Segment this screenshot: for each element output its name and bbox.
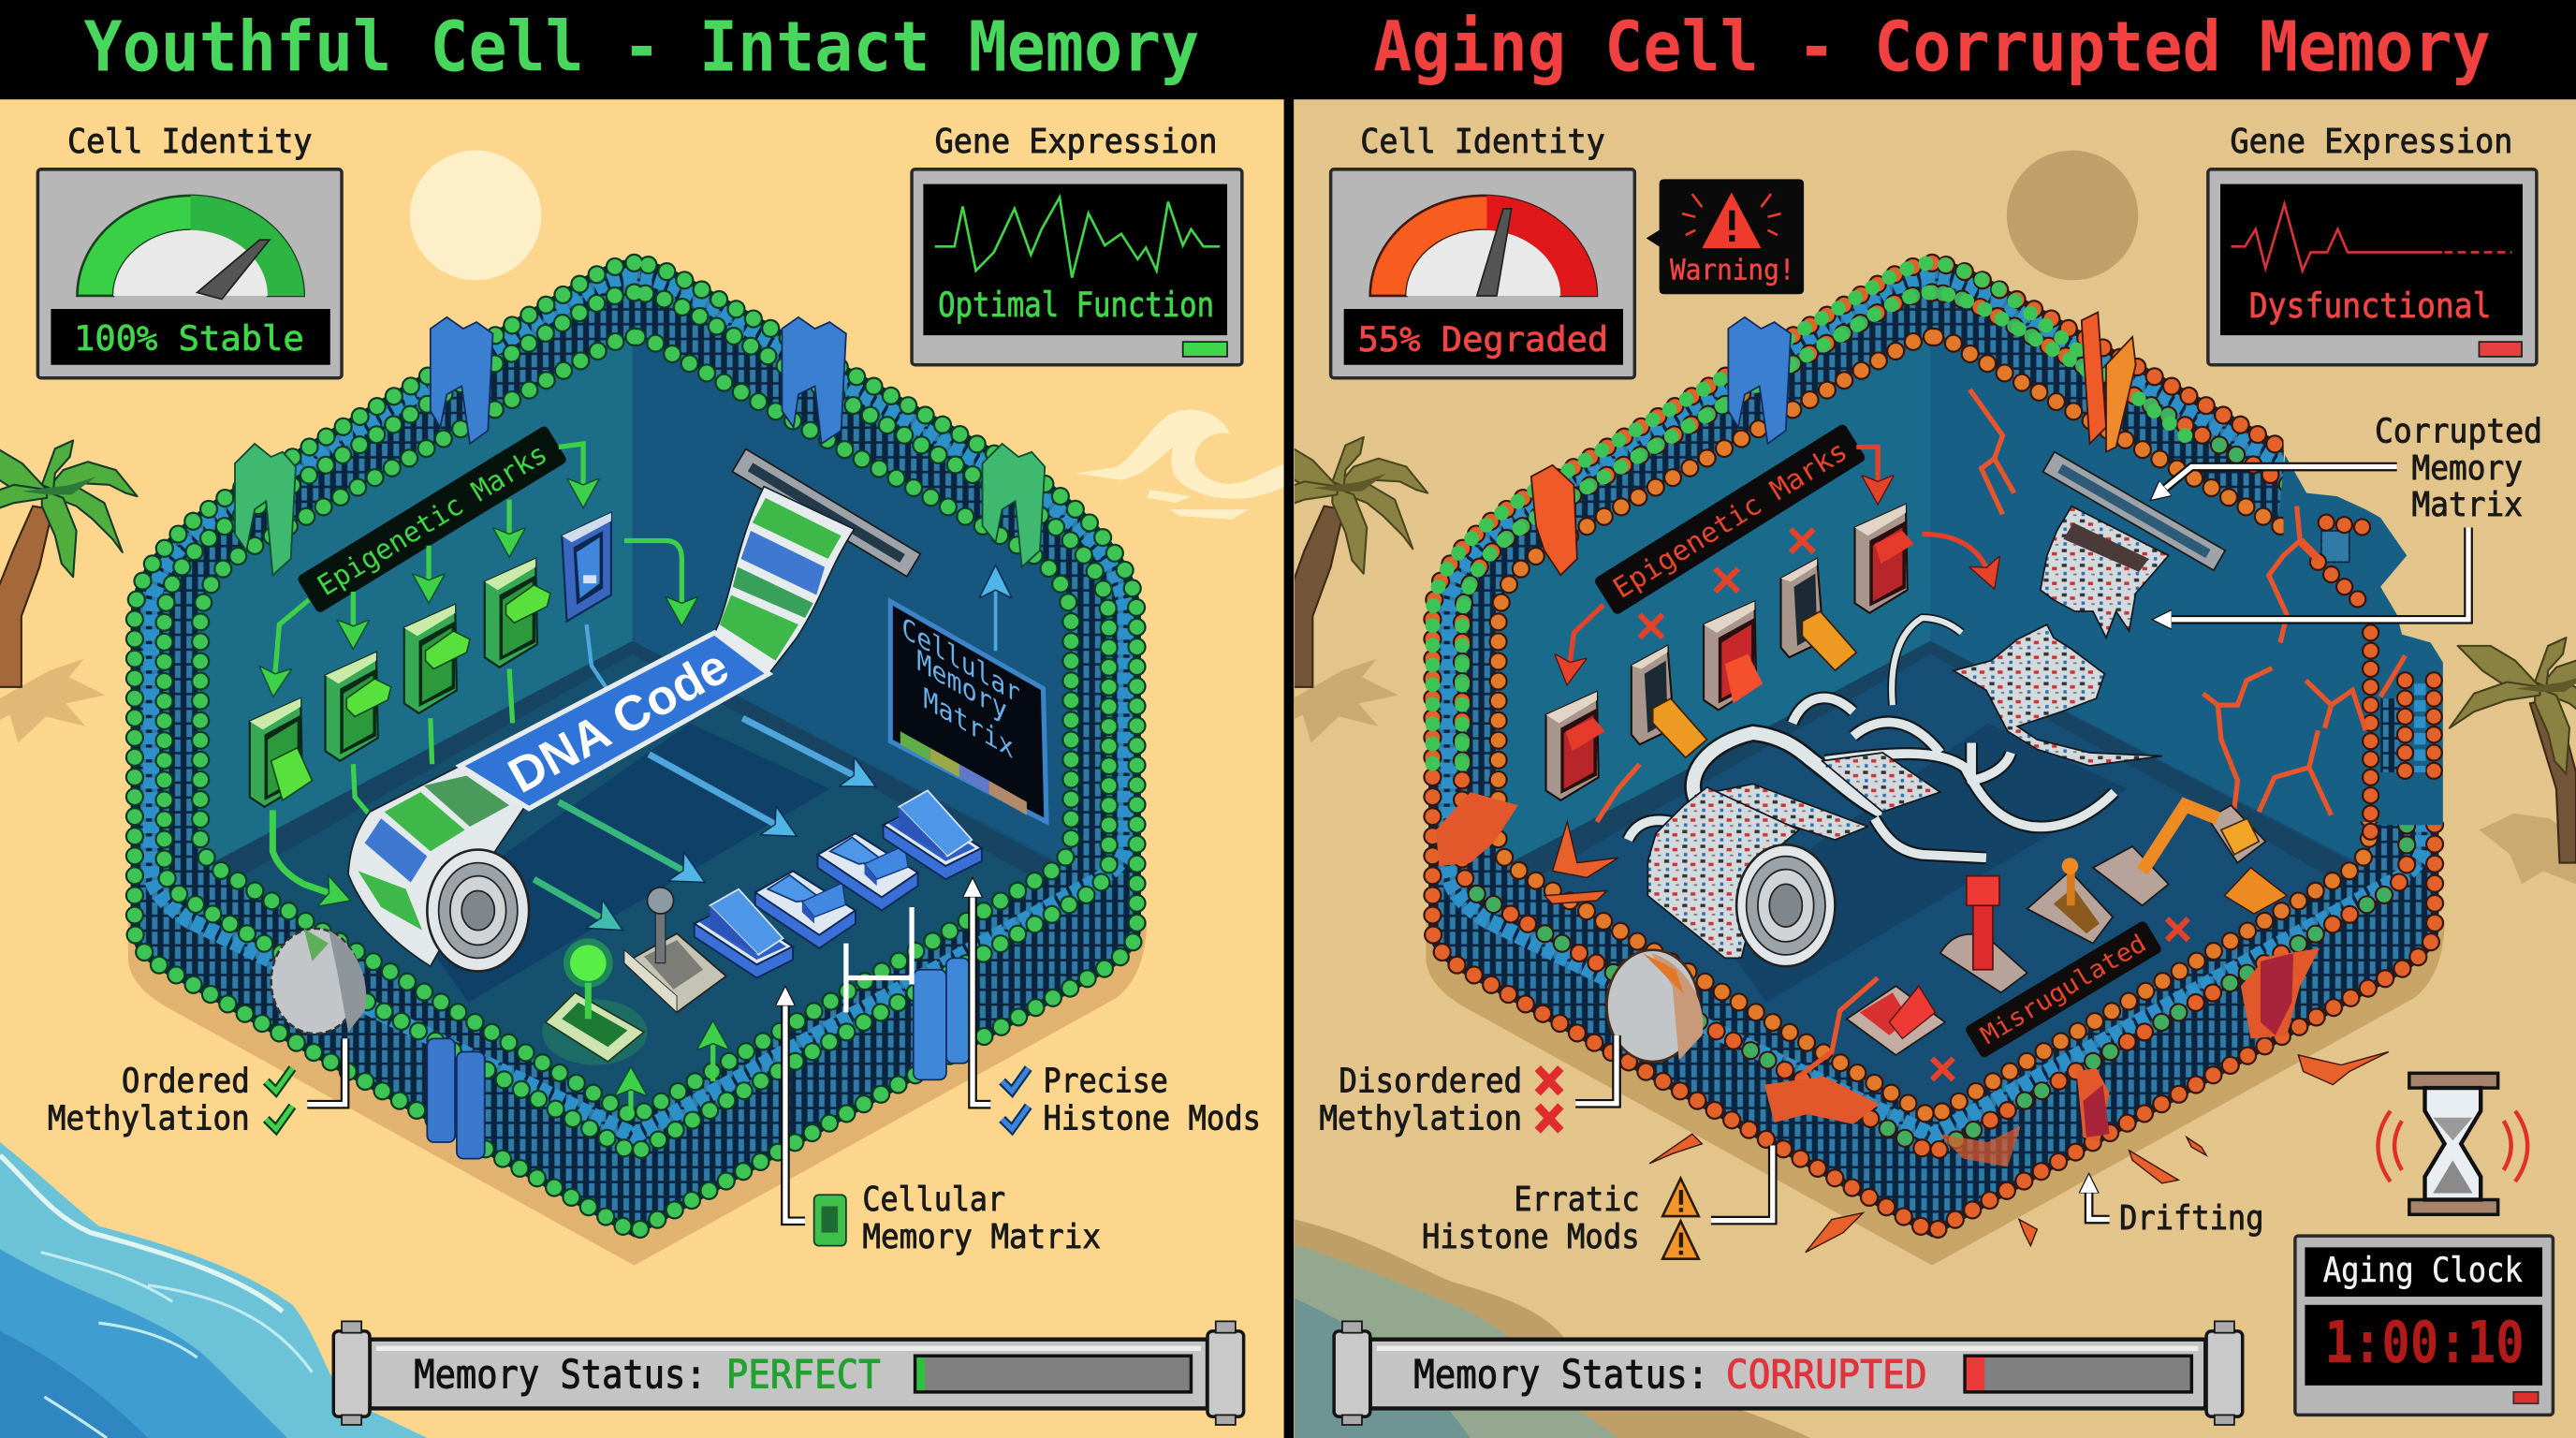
label: cell identity: Cell Identity (67, 123, 312, 161)
status bar: memory perfect: Memory Status: (414, 1351, 707, 1397)
label: epigenetic marks damaged: Epigenetic Marks (1607, 434, 1853, 606)
epigenetic switches (250, 513, 611, 807)
text: dna code: DNA Code (500, 638, 738, 804)
callout: cellular memory matrix: Memory Matrix (862, 1218, 1101, 1256)
tape roll end (427, 850, 529, 971)
callout: cellular memory matrix: Cellular (862, 1181, 1005, 1219)
interior walls and floor (1498, 339, 2368, 1108)
title bars (0, 0, 2576, 99)
callout: ordered methylation: Methylation (48, 1100, 250, 1138)
callout: drifting (2089, 1180, 2264, 1238)
status bar: memory perfect (333, 1321, 1244, 1425)
inner membrane row orange (1499, 337, 2369, 1118)
label: misregulated: Misrugulated (1976, 930, 2151, 1050)
callout: erratic histone mods: Erratic (1514, 1181, 1640, 1219)
cell: intact membrane and interior (128, 263, 1147, 1266)
callout: warning: Warning! (1670, 254, 1794, 286)
label: misregulated (1964, 919, 2163, 1059)
debris on the floor (1544, 822, 2389, 1253)
callout: erratic histone mods: Histone Mods (1422, 1218, 1640, 1256)
label: epigenetic marks: Epigenetic Marks (312, 437, 553, 603)
red joystick (1940, 876, 2027, 992)
cracks (1597, 389, 2405, 1077)
title: aging: Aging Cell - Corrupted Memory (1373, 7, 2491, 87)
label: gene expression: Gene Expression (2231, 123, 2512, 161)
panel: aging clock: 1:00:10 (2324, 1310, 2525, 1376)
monitor: cell identity degraded: 55% Degraded (1358, 319, 1608, 360)
muted beach background right (1294, 98, 2576, 1438)
glowing green joystick (542, 938, 648, 1065)
orange channels (1531, 313, 2136, 575)
cellular memory matrix screen: Memory (916, 643, 1007, 728)
orange lever (2093, 805, 2265, 905)
label: cell identity: Cell Identity (1360, 123, 1605, 161)
callout: disordered methylation: Methylation (1319, 1100, 1522, 1138)
icon: hourglass (2378, 1073, 2527, 1214)
callout: ordered methylation (48, 1038, 345, 1138)
broken slot (2043, 452, 2225, 570)
cell shadow (128, 920, 1147, 1266)
status bar: memory corrupted: CORRUPTED (1726, 1351, 1927, 1397)
panel: youthful cell (0, 0, 1284, 1438)
corrupted dna roll (1647, 787, 1835, 966)
callout: corrupted memory matrix: Matrix (2411, 486, 2523, 524)
tangled corrupted dna ribbon (1628, 618, 2115, 858)
monitor: cell identity gauge: 100% Stable (74, 318, 304, 359)
cellular memory matrix screen: Cellular (902, 610, 1020, 712)
monitor: cell identity gauge (37, 123, 342, 378)
callout: erratic histone mods (1422, 1146, 1773, 1259)
gold lever (2027, 858, 2113, 944)
callout: precise histone mods (973, 884, 1261, 1138)
panel: aging clock (2295, 1236, 2553, 1415)
callout: ordered methylation: Ordered (122, 1062, 250, 1100)
center divider (1284, 0, 1294, 1438)
callout: warning (1647, 179, 1804, 294)
cell: damaged membrane and interior (1426, 263, 2445, 1266)
callout: corrupted memory matrix: Corrupted (2375, 413, 2542, 451)
bracket lines (846, 907, 912, 1012)
label: gene expression: Gene Expression (935, 123, 1218, 161)
ocean water (0, 1142, 427, 1438)
broken red key (1847, 986, 1945, 1055)
monitor: gene expression dysfunctional: Dysfunctional (2249, 286, 2492, 326)
beach background left (0, 0, 1284, 1438)
red x marks (1640, 529, 2188, 1079)
monitor: cell identity degraded (1331, 123, 1634, 378)
icon: dim sun (2007, 151, 2138, 280)
icon: damaged methylation wheel (1606, 950, 1703, 1062)
cellular memory matrix screen (890, 601, 1046, 822)
icon: methylation wheel (271, 929, 366, 1034)
torn tape piece (1954, 624, 2162, 766)
callout: cellular memory matrix (785, 992, 1101, 1256)
monitor: gene expression (912, 123, 1242, 365)
red arrows (1569, 447, 1989, 670)
monitor: gene expression: Optimal Function (938, 285, 1214, 325)
icon: ocean wave (1076, 410, 1284, 520)
callout: precise histone mods: Histone Mods (1043, 1100, 1261, 1138)
monitor: gene expression dysfunctional (2208, 123, 2537, 365)
callout: corrupted memory matrix: Memory (2411, 449, 2523, 488)
panel: aging cell (1247, 98, 2576, 1438)
callout: disordered methylation (1319, 1035, 1617, 1138)
gray joystick (624, 888, 726, 1012)
green arrows from epigenetic marks (272, 444, 681, 896)
membrane ring (135, 263, 1137, 1233)
slot for dna tape (732, 449, 920, 577)
blue regulator keys (695, 790, 982, 977)
polluted water (1295, 1220, 1810, 1438)
palm tree left (0, 440, 138, 742)
panel: aging clock: Aging Clock (2323, 1250, 2523, 1290)
arrows from dna to regulators (534, 592, 996, 924)
green upward arrows (631, 1035, 713, 1118)
cellular memory matrix screen: Matrix (923, 681, 1014, 766)
blue arrow to screen (995, 579, 997, 651)
dna scroll (348, 487, 855, 971)
status bar: memory corrupted: Memory Status: (1413, 1351, 1708, 1397)
palm tree wilted left (1295, 436, 1428, 743)
inner membrane row (200, 337, 1071, 1118)
exposed interior at broken wall (2276, 455, 2443, 825)
corrosion patches (1436, 792, 2320, 1167)
title: youthful: Youthful Cell - Intact Memory (84, 7, 1199, 87)
callout: drifting: Drifting (2119, 1199, 2264, 1238)
broken epigenetic switches (1546, 505, 1914, 800)
corrupted tape from slot (2041, 506, 2169, 638)
palm tree wilted right (2450, 638, 2576, 884)
status bar: memory perfect: PERFECT (726, 1351, 881, 1397)
callout: precise histone mods: Precise (1043, 1062, 1168, 1100)
callout: disordered methylation: Disordered (1339, 1062, 1522, 1100)
cell shadow (1426, 920, 2445, 1266)
damaged membrane ring (1432, 263, 2435, 1233)
membrane fragments (2318, 522, 2434, 838)
membrane channels (235, 317, 1045, 1159)
status bar: memory corrupted (1334, 1321, 2243, 1425)
callout: corrupted memory matrix (2156, 413, 2542, 620)
icon: sun (410, 151, 541, 280)
cell interior walls and floor (200, 339, 1071, 1108)
